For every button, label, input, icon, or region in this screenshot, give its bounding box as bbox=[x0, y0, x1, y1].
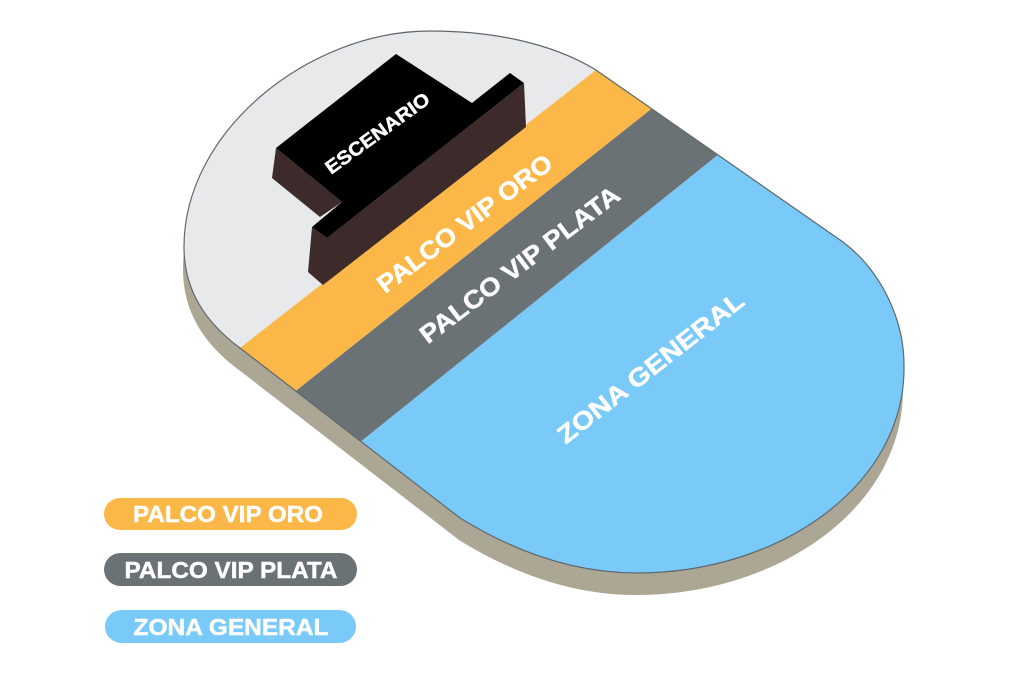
label: palco vip oro: PALCO VIP ORO bbox=[372, 149, 558, 299]
stage side faces bbox=[272, 83, 526, 285]
zone: palco vip oro band bbox=[240, 70, 651, 390]
legend: zona general: ZONA GENERAL bbox=[134, 614, 328, 640]
zone: back area bbox=[184, 32, 702, 441]
stage bbox=[272, 54, 526, 285]
label: zona general: ZONA GENERAL bbox=[552, 286, 750, 450]
venue floor bbox=[184, 32, 904, 572]
label: escenario: ESCENARIO bbox=[322, 89, 434, 179]
stage top bbox=[276, 54, 524, 238]
venue outline bbox=[184, 31, 904, 573]
legend: palco vip plata bbox=[104, 553, 357, 586]
venue base side bbox=[183, 53, 903, 595]
legend bbox=[104, 498, 357, 643]
legend: zona general bbox=[105, 610, 356, 643]
legend: palco vip plata: PALCO VIP PLATA bbox=[124, 557, 338, 583]
label: palco vip plata: PALCO VIP PLATA bbox=[415, 181, 625, 349]
seating map infographic bbox=[104, 30, 905, 643]
zone: palco vip plata band bbox=[296, 109, 718, 441]
legend: palco vip oro bbox=[104, 498, 357, 530]
legend: palco vip oro: PALCO VIP ORO bbox=[133, 501, 323, 527]
zone: general band bbox=[362, 155, 904, 572]
